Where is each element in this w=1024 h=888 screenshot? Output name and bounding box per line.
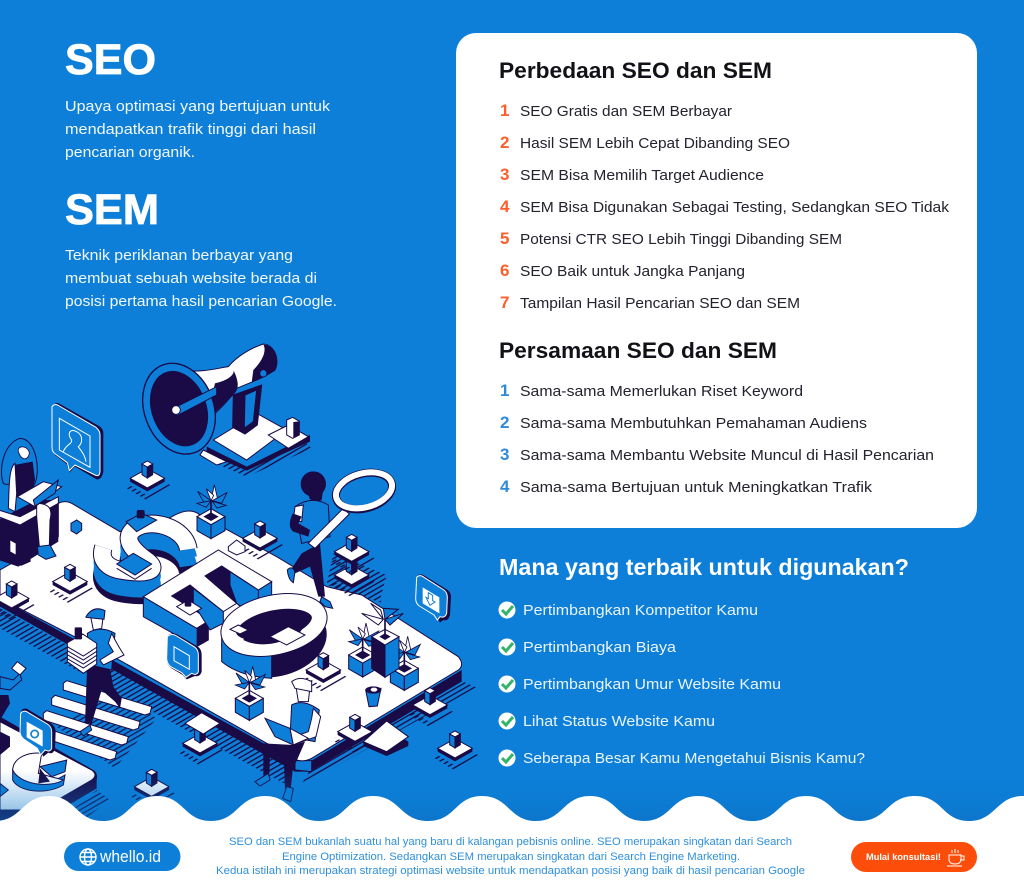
icon: download bubble [416,574,451,623]
list: perbedaan: 1 [500,101,509,120]
person at left edge holding card [0,662,26,720]
icon: globe [80,849,96,865]
heading: Persamaan SEO dan SEM: Persamaan SEO dan SEM [499,338,777,363]
button: Mulai konsultasi [851,842,977,872]
list: persamaan: Sama-sama Memerlukan Riset Keyword [520,383,803,400]
list: perbedaan: Hasil SEM Lebih Cepat Dibanding SEO [520,135,790,152]
button: Mulai konsultasi: Mulai konsultasi! [866,852,941,863]
icon: chat bubble near E [167,633,202,679]
text block: SEO definition: mendapatkan trafik tinggi dari hasil [65,121,316,138]
list: persamaan: 3 [500,445,509,464]
text block: SEM definition: posisi pertama hasil pencarian Google. [65,293,337,310]
3D letter E [143,550,272,647]
list: persamaan: 2 [500,413,509,432]
heading: Mana yang terbaik: Mana yang terbaik untuk digunakan? [499,554,909,580]
person with magnifying glass [287,466,396,608]
list: persamaan: Sama-sama Membantu Website Muncul di Hasil Pencarian [520,447,934,464]
list: perbedaan: 4 [500,197,510,216]
footer text [216,836,805,877]
person with laptop sitting on platform edge [255,678,321,802]
list: perbedaan: 6 [500,261,509,280]
tall planter [362,603,403,677]
heading: Perbedaan SEO dan SEM: Perbedaan SEO dan SEM [499,58,772,83]
list: persamaan: 4 [500,477,510,496]
logo pill: whello.id: whello.id [99,847,161,866]
list: perbedaan: SEM Bisa Memilih Target Audience [520,167,764,184]
checklist: Pertimbangkan Kompetitor Kamu [523,602,758,619]
list: perbedaan: Potensi CTR SEO Lebih Tinggi Dibanding SEM [520,231,842,248]
bottom shading above waves [0,770,1024,822]
illustration: isometric SEO scene [0,344,479,820]
lower left platform with pie chart [0,708,110,820]
3D letter O [214,593,334,687]
stair bars [35,681,157,768]
text block: SEO definition: Upaya optimasi yang bertujuan untuk [65,98,331,115]
woman with laptop on block [0,438,62,567]
list: perbedaan: 2 [500,133,509,152]
3D letter S [102,524,188,595]
plants [197,485,420,720]
list: persamaan: Sama-sama Membutuhkan Pemahaman Audiens [520,415,867,432]
checklist: Pertimbangkan Biaya [523,639,677,656]
text block: SEM definition: Teknik periklanan berbayar yang [65,247,293,264]
list: persamaan: 1 [500,381,509,400]
text block: SEM definition: membuat sebuah website berada di [65,270,317,287]
text block: SEO definition [65,98,331,161]
list: persamaan: Sama-sama Bertujuan untuk Meningkatkan Trafik [520,479,873,496]
checklist [498,602,865,767]
logo pill: whello.id [64,842,180,871]
text block: SEO definition: pencarian organik. [65,144,195,161]
checklist: Lihat Status Website Kamu [523,713,715,730]
list: persamaan [500,381,934,496]
main platform [0,502,476,787]
list: perbedaan: Tampilan Hasil Pencarian SEO dan SEM [520,295,800,312]
list: perbedaan: SEM Bisa Digunakan Sebagai Testing, Sedangkan SEO Tidak [520,199,950,216]
list: perbedaan: SEO Baik untuk Jangka Panjang [520,263,745,280]
text block: SEM definition [65,247,337,310]
footer text: Kedua istilah ini merupakan strategi optimasi website untuk mendapatkan posisi yang baik di hasil pencarian Google [216,865,805,877]
footer text: SEO dan SEM bukanlah suatu hal yang baru di kalangan pebisnis online. SEO merupakan singkatan dari Search [229,836,792,848]
heading: SEO: SEO [65,36,156,84]
small isometric pads with boxes [0,461,479,809]
list: perbedaan [500,101,950,312]
trash bin [365,686,381,707]
wave footer background [0,796,1024,888]
panel: perbedaan dan persamaan [456,33,977,528]
list: perbedaan: 7 [500,293,509,312]
icon: megaphone on pedestal [130,344,312,477]
footer text: Engine Optimization. Sedangkan SEM merupakan singkatan dari Search Engine Marketing. [282,851,740,863]
icon: profile speech bubble [52,403,103,479]
checklist: Seberapa Besar Kamu Mengetahui Bisnis Kamu? [523,750,865,767]
list: perbedaan: 5 [500,229,509,248]
blocks and cup near S [71,510,245,555]
list: perbedaan: 3 [500,165,509,184]
list: perbedaan: SEO Gratis dan SEM Berbayar [520,103,732,120]
heading: SEM: SEM [65,186,159,234]
person carrying paper stack [67,609,124,736]
icon: coffee cup [947,849,964,866]
checklist: Pertimbangkan Umur Website Kamu [523,676,781,693]
large flat pad [185,713,408,756]
